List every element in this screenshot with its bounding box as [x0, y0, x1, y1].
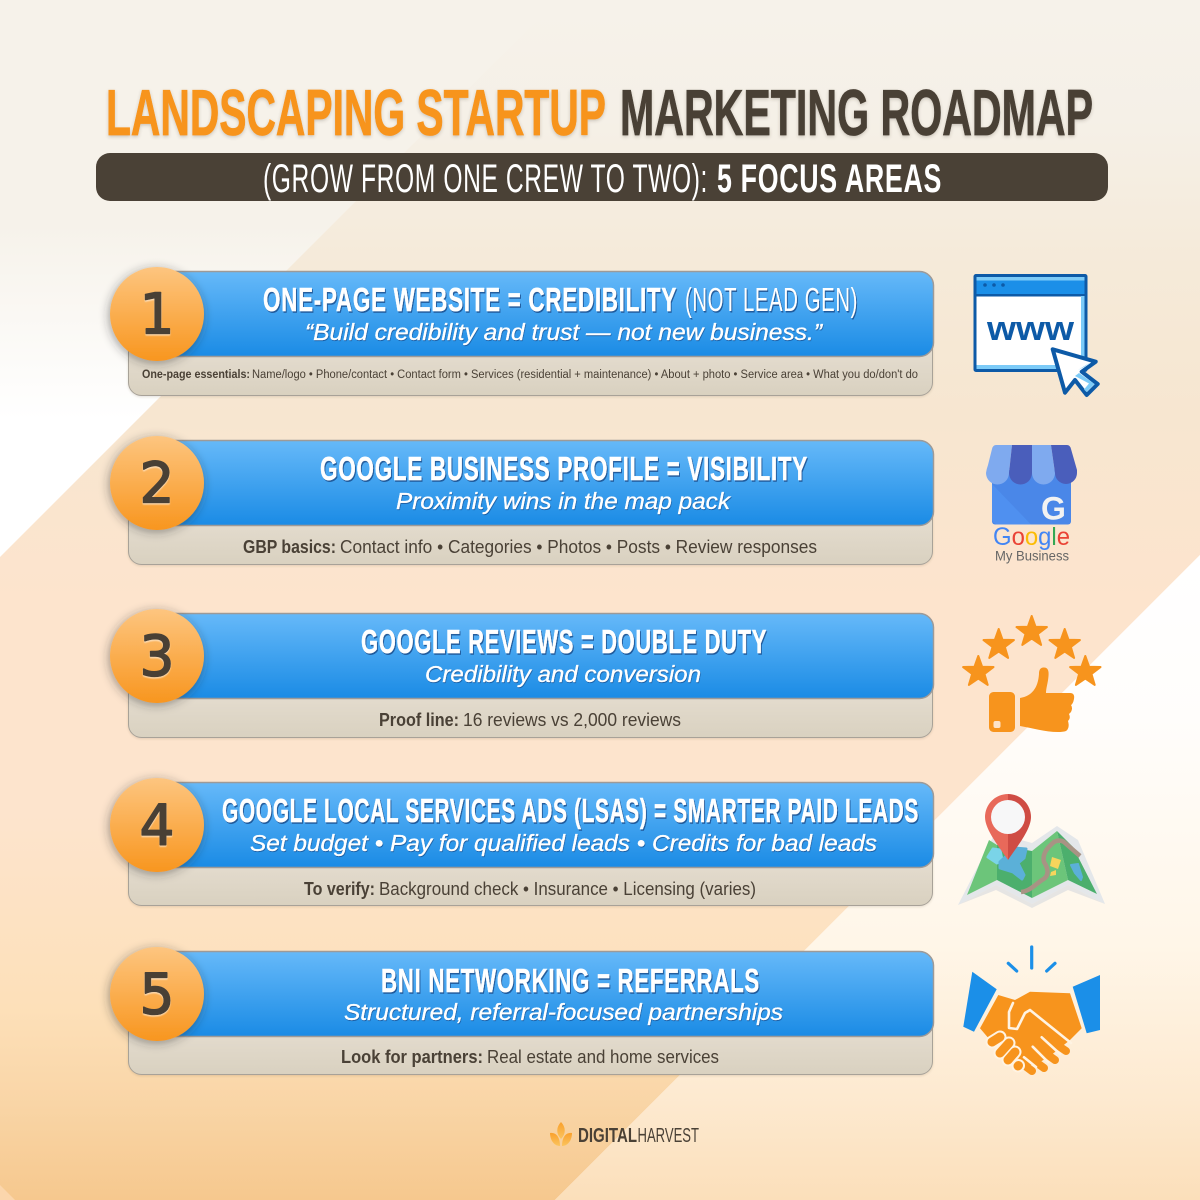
- icon: google my business: [986, 445, 1077, 564]
- detail strip 4: To verify:: [304, 879, 375, 899]
- detail strip 4: Background check • Insurance • Licensing (varies): [379, 879, 756, 899]
- detail strip 1: [128, 331, 932, 396]
- number badge 4: [110, 778, 204, 872]
- banner 1: [150, 272, 934, 356]
- subtitle banner: (GROW FROM ONE CREW TO TWO):: [263, 157, 708, 201]
- icon: browser window with www and cursor: www: [986, 310, 1075, 348]
- banner 2: GOOGLE BUSINESS PROFILE = VISIBILITY: [320, 450, 808, 487]
- number badge 2: 2: [140, 452, 174, 516]
- icon: google my business: My Business: [995, 548, 1069, 564]
- detail strip 5: Look for partners:: [341, 1047, 483, 1067]
- detail strip 2: Contact info • Categories • Photos • Posts • Review responses: [340, 537, 817, 557]
- banner 3: Credibility and conversion: [425, 661, 701, 687]
- panel: step 2 google business profile: [110, 436, 934, 564]
- number badge 5: [110, 947, 204, 1041]
- icon: browser window with www and cursor: [975, 276, 1098, 395]
- banner 2: [150, 440, 934, 526]
- detail strip 2: [128, 500, 932, 564]
- banner 3: [150, 614, 934, 698]
- number badge 4: 4: [140, 794, 174, 858]
- icon: stars and thumbs up: [963, 616, 1101, 732]
- detail strip 3: [128, 673, 932, 738]
- banner 2: Proximity wins in the map pack: [396, 488, 732, 514]
- detail strip 3: Proof line:: [379, 710, 459, 730]
- panel: step 3 google reviews: [110, 609, 934, 738]
- panel: step 1 website: [110, 267, 934, 396]
- detail strip 1: One-page essentials:: [142, 369, 250, 381]
- title: LANDSCAPING STARTUP: [106, 76, 606, 149]
- banner 1: “Build credibility and trust — not new business.”: [305, 319, 823, 345]
- detail strip 1: Name/logo • Phone/contact • Contact form • Services (residential + maintenance) • About + photo • Service area • What you do/don't do: [252, 369, 918, 381]
- footer logo: digital harvest: DIGITAL: [578, 1124, 637, 1147]
- subtitle banner: [96, 153, 1108, 201]
- number badge 1: 1: [140, 282, 174, 348]
- detail strip 3: 16 reviews vs 2,000 reviews: [463, 710, 681, 730]
- banner 1: (NOT LEAD GEN): [685, 281, 858, 318]
- number badge 2: [110, 436, 204, 530]
- banner 5: BNI NETWORKING = REFERRALS: [381, 962, 760, 999]
- icon: google my business: G: [1041, 490, 1066, 526]
- banner 3: GOOGLE REVIEWS = DOUBLE DUTY: [361, 623, 767, 660]
- detail strip 5: Real estate and home services: [487, 1047, 719, 1067]
- number badge 3: 3: [140, 624, 174, 690]
- banner 4: [150, 782, 934, 868]
- footer logo: digital harvest: HARVEST: [638, 1124, 699, 1147]
- icon: google my business: Google: [993, 523, 1070, 551]
- banner 1: ONE-PAGE WEBSITE = CREDIBILITY: [263, 281, 677, 318]
- panel: step 4 local services ads: [110, 778, 934, 906]
- icon: handshake: [963, 947, 1100, 1071]
- footer logo: digital harvest: [550, 1122, 699, 1147]
- detail strip 4: [128, 842, 932, 906]
- banner 5: [150, 952, 934, 1036]
- banner 5: Structured, referral-focused partnerships: [344, 999, 784, 1025]
- detail strip 2: GBP basics:: [243, 537, 336, 557]
- number badge 1: [110, 267, 204, 361]
- detail strip 5: [128, 1011, 932, 1074]
- panel: step 5 bni networking: [110, 947, 934, 1074]
- number badge 3: [110, 609, 204, 703]
- subtitle banner: 5 FOCUS AREAS: [717, 157, 942, 201]
- icon: map with location pin: [958, 794, 1105, 908]
- banner 4: Set budget • Pay for qualified leads • Credits for bad leads: [250, 830, 878, 856]
- number badge 5: 5: [140, 962, 174, 1028]
